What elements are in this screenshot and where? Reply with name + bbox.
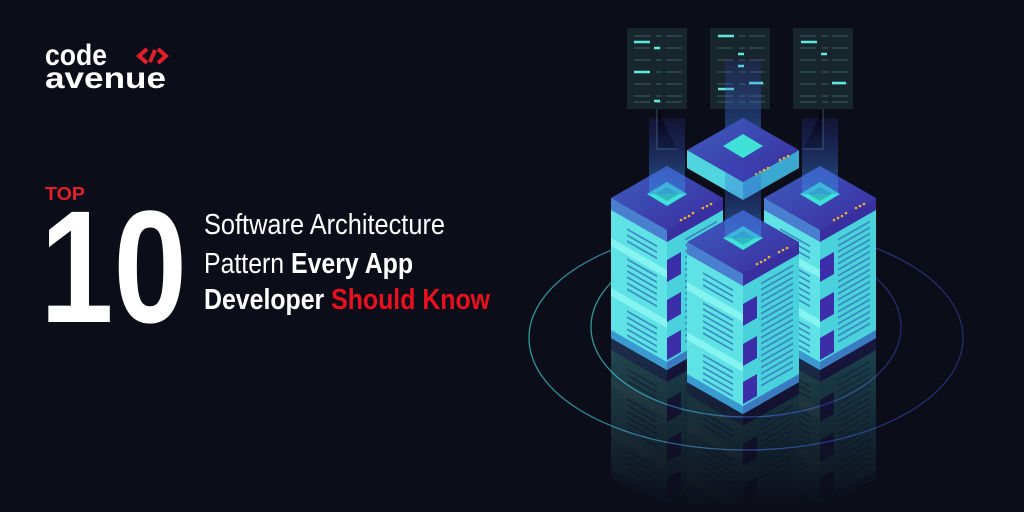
logo: avenue [45, 62, 166, 95]
rings [529, 226, 963, 450]
reflections [611, 338, 876, 488]
title text: Software Architecture [204, 209, 445, 241]
server tower: front [687, 162, 799, 414]
logo: code [45, 39, 107, 72]
server tower: right [764, 118, 876, 370]
server tower: left [611, 118, 723, 370]
title text [204, 209, 490, 316]
icon: code brackets [139, 49, 166, 63]
data panels [627, 28, 853, 149]
server block: back [687, 60, 799, 200]
title text: Pattern Every App [204, 248, 413, 280]
title text: Developer Should Know [204, 284, 490, 316]
logo [45, 39, 166, 95]
heading: TOP 10: TOP [45, 184, 85, 204]
heading: TOP 10: 10 [40, 177, 187, 356]
